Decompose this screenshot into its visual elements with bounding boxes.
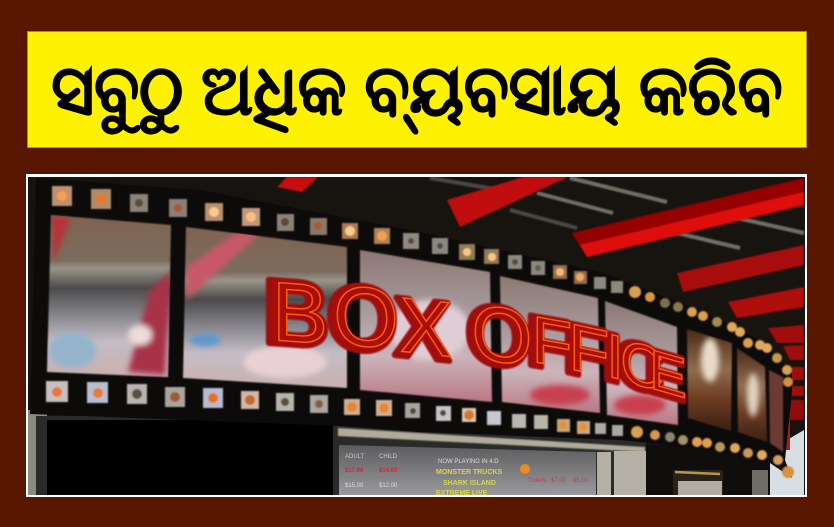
neon tube outlines: B [272,264,328,362]
sign letter bodies: B [263,260,329,367]
red ceiling beams [277,177,804,420]
ceiling [28,177,805,495]
sign letter bodies: I [603,317,621,398]
neon tube outlines: I [606,321,624,394]
film strip [30,178,792,478]
title banner: ସବୁଠୁ ଅଧିକ ବ୍ୟବସାୟ କରିବ [51,50,783,128]
menu board: $12.00 [379,483,398,489]
neon tube outlines: C [620,326,664,405]
sign letter bodies: O [465,285,531,388]
menu board: MONSTER TRUCKS [436,469,502,476]
menu board: SHARK ISLAND [443,480,496,487]
title banner [28,32,806,147]
menu board: CHILD [379,454,398,460]
panel: box office photo [26,174,807,497]
top row of marquee bulbs [52,186,793,387]
lower storefront [28,410,804,497]
glass panels [47,215,783,452]
neon tube outlines: F [569,310,609,392]
neon tube outlines: O [333,268,399,366]
black screen [47,420,333,495]
menu board: Tickets [528,478,547,484]
menu board: $14.00 [379,468,398,474]
menu board: NOW PLAYING IN 4:D [438,459,499,465]
sign letter bodies: F [526,300,570,388]
menu board: $17.00 [345,468,364,474]
sign letter bodies [263,260,686,416]
sign letter bodies: E [644,335,686,416]
menu board: $7.00 [551,478,567,484]
sign letter bodies: C [615,324,663,410]
menu board [339,445,646,497]
menu board: ADULT [345,454,365,460]
sign letter bodies: F [563,307,607,396]
neon tube outlines: O [472,287,532,383]
sign letter bodies: X [394,279,450,379]
bottom row of marquee bulbs [46,381,794,478]
menu board: $15.00 [345,483,364,489]
neon tube outlines: F [532,303,572,383]
sign letter bodies: O [326,265,398,372]
neon tube outlines: X [400,280,452,374]
neon tube outlines: E [649,338,687,411]
menu board: $5.00 [573,478,589,484]
neon sign: BOX OFFICE [263,260,687,416]
glass reflections [48,215,759,417]
neon tube outlines [272,264,687,411]
